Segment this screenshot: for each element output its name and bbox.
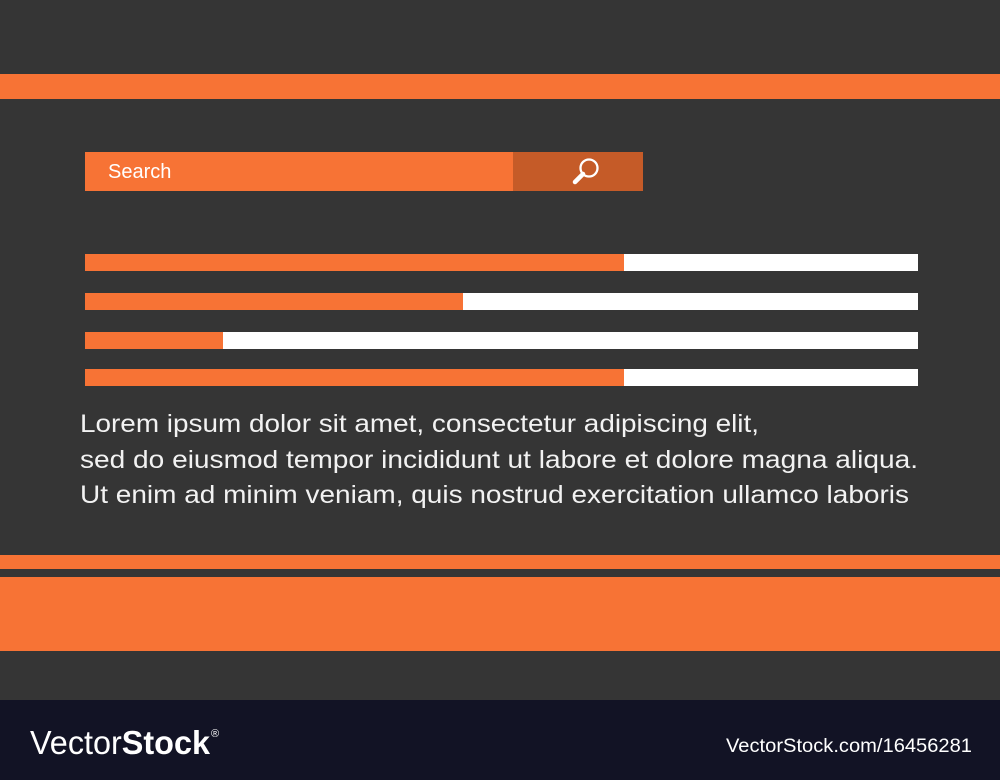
lower orange stripe thin: [0, 555, 1000, 569]
bar 2: [85, 293, 918, 310]
footer logo: VectorStock: [30, 724, 211, 761]
body text: [80, 410, 918, 509]
search bar: [85, 152, 643, 191]
search button with magnifier icon: [513, 152, 643, 191]
top orange stripe: [0, 74, 1000, 99]
bar 1: [85, 254, 918, 271]
lower orange stripe wide: [0, 577, 1000, 651]
body text: sed do eiusmod tempor incididunt ut labore et dolore magna aliqua.: [80, 446, 918, 474]
footer url: VectorStock.com/16456281: [726, 736, 972, 757]
search label: Search: [108, 161, 171, 183]
footer logo: ®: [211, 728, 219, 740]
footer: [0, 700, 1000, 780]
bar 3: [85, 332, 918, 349]
body text: Lorem ipsum dolor sit amet, consectetur adipiscing elit,: [80, 410, 759, 438]
body text: Ut enim ad minim veniam, quis nostrud exercitation ullamco laboris: [80, 481, 909, 509]
progress bars: [85, 254, 918, 386]
bar 4: [85, 369, 918, 386]
